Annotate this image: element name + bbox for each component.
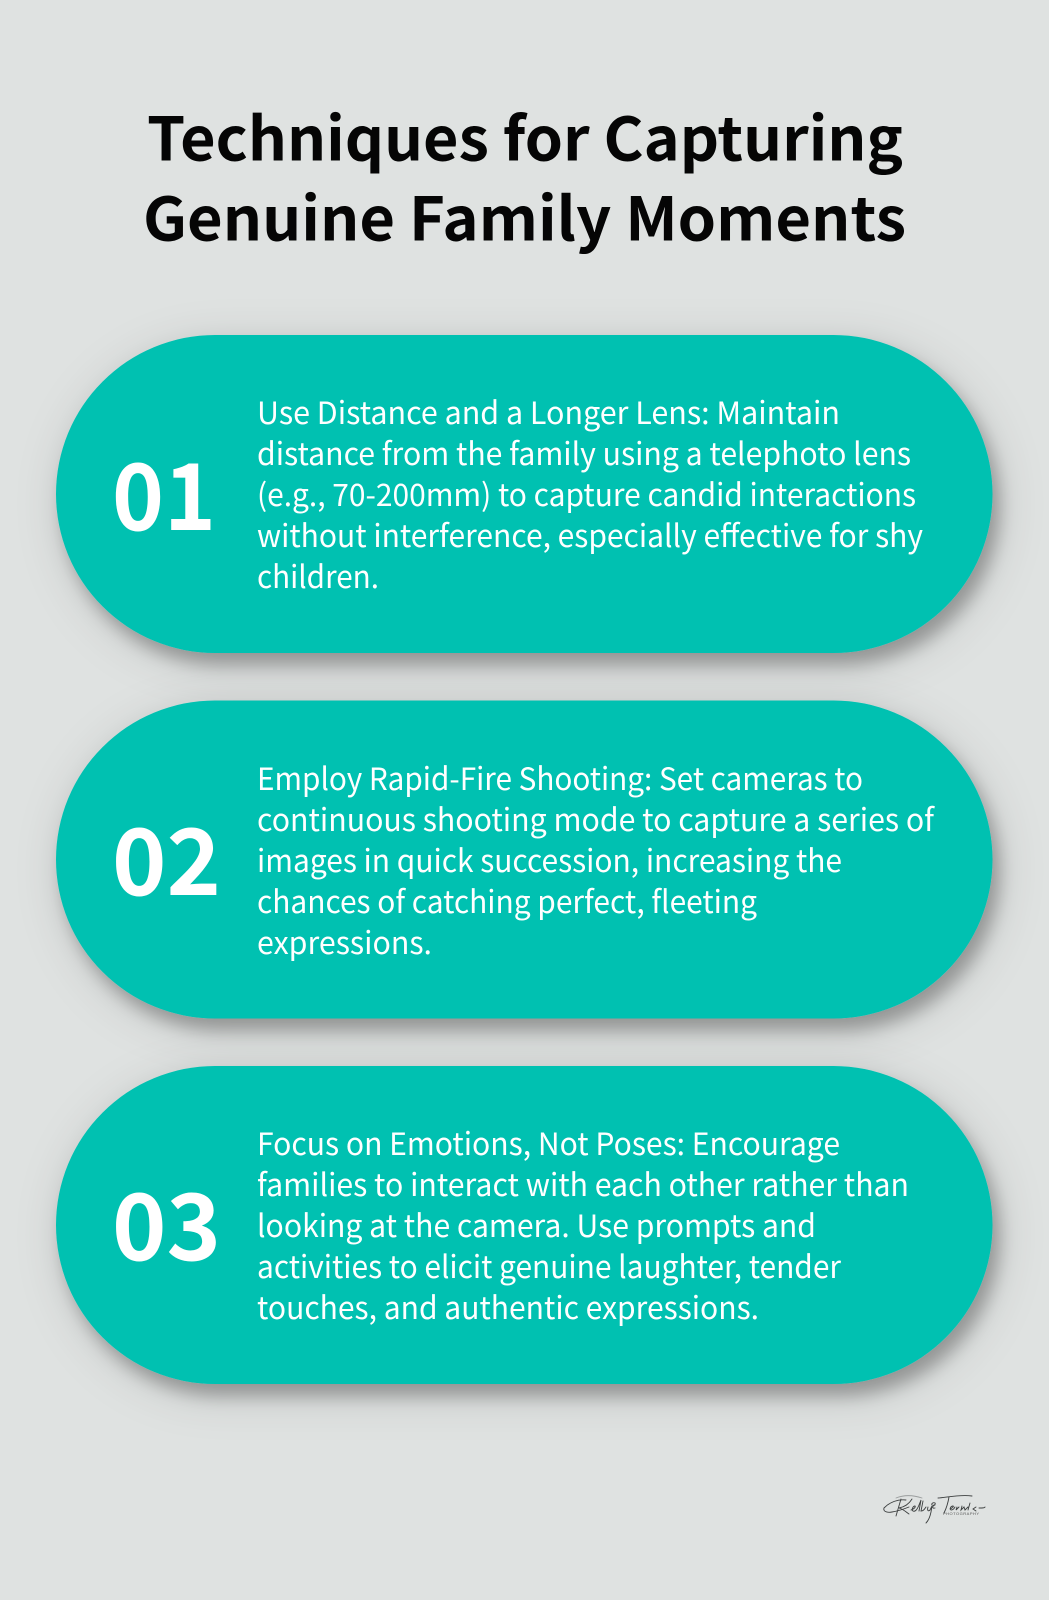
text: photography: PHOTOGRAPHY <box>943 1511 980 1516</box>
text: employ rapid-fire shooting: continuous shooting mode to capture a series of <box>257 795 936 840</box>
text: focus on emotions, not poses: Focus on Emotions, Not Poses: Encourage <box>257 1119 840 1164</box>
signature logo <box>884 1495 985 1523</box>
number 01: 01 <box>112 424 216 557</box>
text: employ rapid-fire shooting <box>257 754 936 963</box>
text: use distance and a longer lens: without interference, especially effective for shy <box>257 511 923 556</box>
text: use distance and a longer lens: Use Distance and a Longer Lens: Maintain <box>257 388 840 433</box>
panel: technique 02 <box>56 700 992 1018</box>
panel: technique 01 <box>56 335 992 653</box>
text: employ rapid-fire shooting: Employ Rapid-Fire Shooting: Set cameras to <box>257 754 863 799</box>
number 02: 02 <box>112 789 221 922</box>
text: focus on emotions, not poses: touches, and authentic expressions. <box>257 1283 759 1328</box>
title <box>143 92 906 258</box>
number 03: 03 <box>112 1154 221 1287</box>
text: employ rapid-fire shooting: images in quick succession, increasing the <box>257 836 842 881</box>
text: use distance and a longer lens: distance from the family using a telephoto lens <box>257 429 911 474</box>
panel: technique 03 <box>56 1066 992 1384</box>
text: focus on emotions, not poses: activities to elicit genuine laughter, tender <box>257 1242 842 1287</box>
text: focus on emotions, not poses <box>257 1119 909 1328</box>
title: Techniques for Capturing <box>147 92 903 178</box>
text: use distance and a longer lens: (e.g., 70-200mm) to capture candid interactions <box>257 470 916 515</box>
text: focus on emotions, not poses: families to interact with each other rather than <box>257 1160 909 1205</box>
text: use distance and a longer lens <box>257 388 923 597</box>
text: focus on emotions, not poses: looking at the camera. Use prompts and <box>257 1201 816 1246</box>
text: use distance and a longer lens: children. <box>257 552 379 597</box>
text: employ rapid-fire shooting: chances of catching perfect, fleeting <box>257 877 757 922</box>
title: Genuine Family Moments <box>143 172 906 258</box>
text: employ rapid-fire shooting: expressions. <box>257 918 432 963</box>
